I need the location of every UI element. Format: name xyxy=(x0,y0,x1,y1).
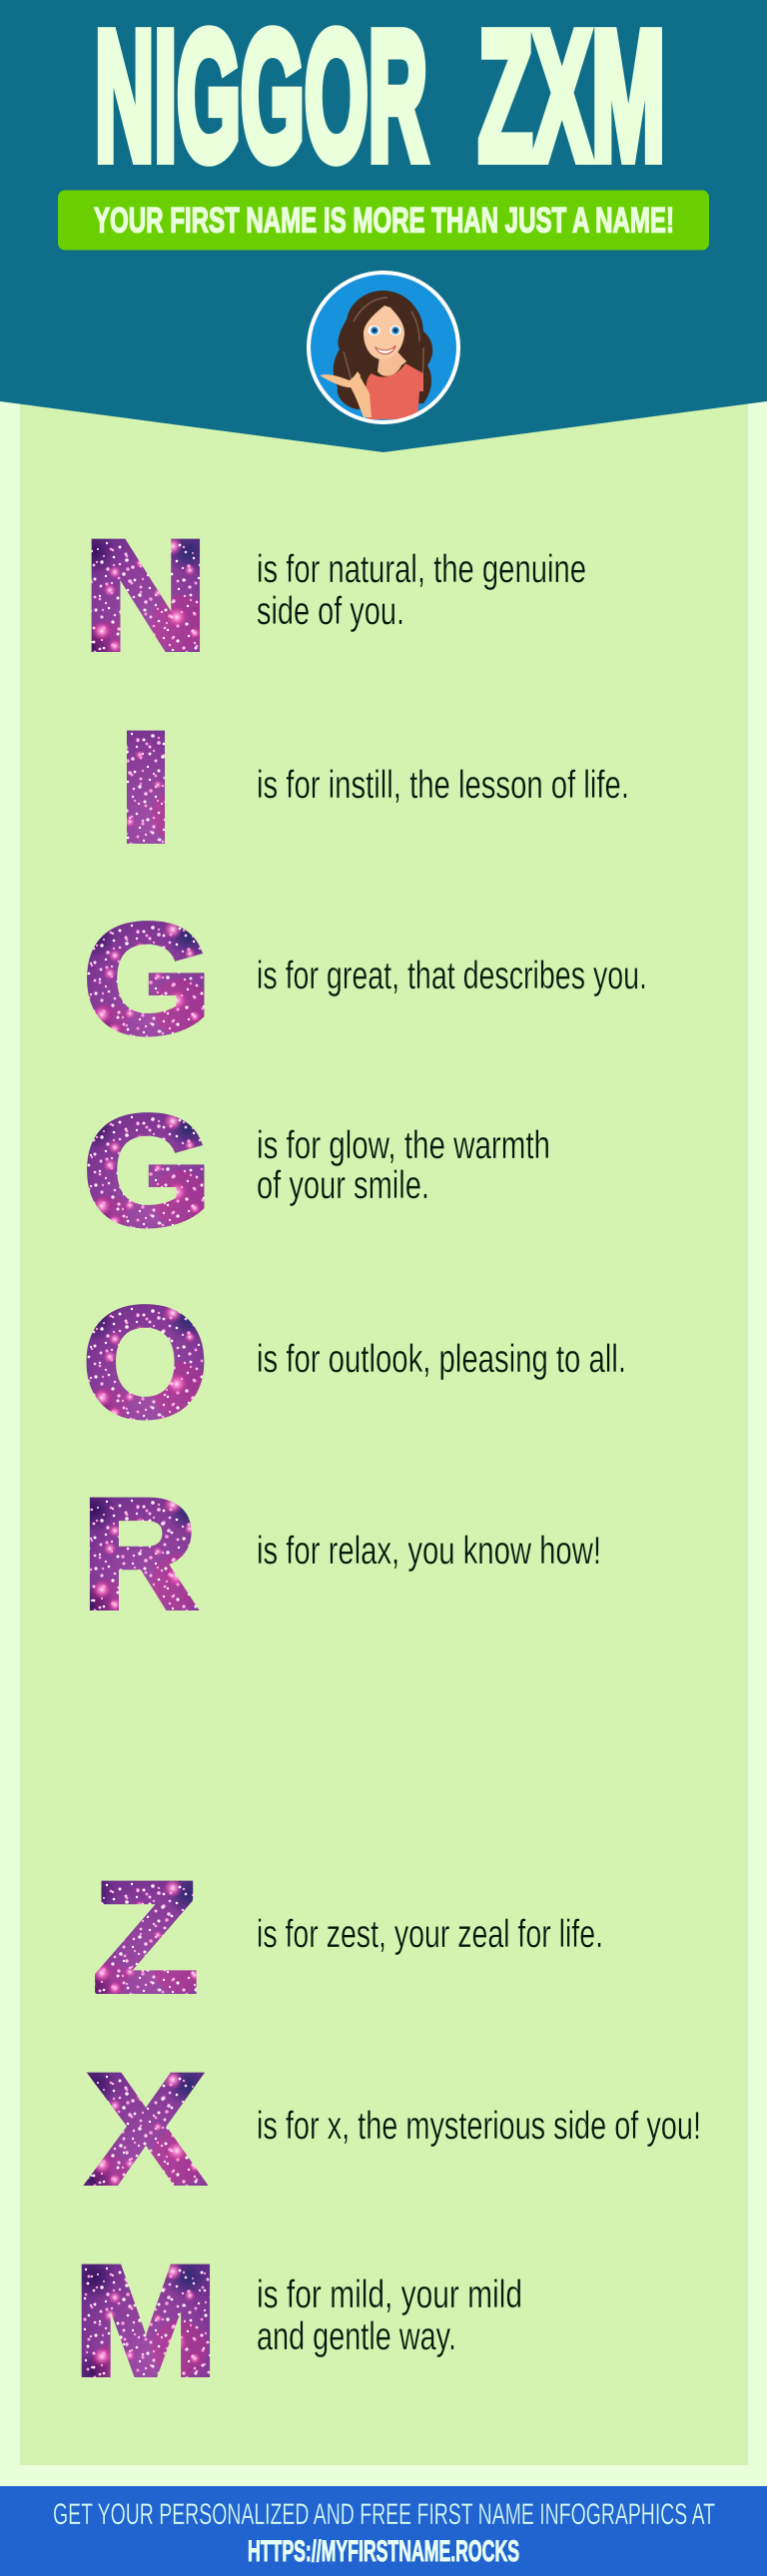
row G second xyxy=(84,1084,550,1258)
footer xyxy=(0,2486,767,2576)
letter Z: Z xyxy=(93,1851,198,2025)
description M xyxy=(257,2273,522,2358)
description Z: is for zest, your zeal for life. xyxy=(257,1913,603,1956)
description I: is for instill, the lesson of life. xyxy=(257,764,629,807)
letter N: N xyxy=(83,509,208,683)
description R: is for relax, you know how! xyxy=(257,1530,601,1573)
letter O: O xyxy=(83,1276,208,1450)
description N: is for natural, the genuine xyxy=(257,548,586,591)
icon: woman avatar xyxy=(307,271,460,424)
footer url: HTTPS://MYFIRSTNAME.ROCKS xyxy=(248,2535,519,2568)
header banner xyxy=(0,0,767,452)
row X xyxy=(88,2043,701,2217)
description G: is for great, that describes you. xyxy=(257,955,647,997)
row N xyxy=(83,509,586,683)
row G xyxy=(84,893,647,1066)
description O: is for outlook, pleasing to all. xyxy=(257,1338,626,1381)
letter R: R xyxy=(82,1468,197,1641)
row R xyxy=(82,1468,601,1641)
description G: of your smile. xyxy=(257,1164,429,1207)
subtitle banner xyxy=(58,190,709,250)
description N: side of you. xyxy=(257,590,404,633)
letter M: M xyxy=(73,2235,218,2408)
letter I: I xyxy=(117,701,175,875)
description G: is for glow, the warmth xyxy=(257,1124,550,1167)
description N xyxy=(257,548,586,633)
panel: content background xyxy=(20,379,748,2465)
letter G: G xyxy=(84,893,212,1066)
description G xyxy=(257,1124,550,1207)
row I xyxy=(117,701,629,875)
letter X: X xyxy=(88,2043,204,2217)
description M: and gentle way. xyxy=(257,2315,456,2358)
description M: is for mild, your mild xyxy=(257,2273,522,2316)
row Z xyxy=(93,1851,603,2025)
letter G: G xyxy=(84,1084,212,1258)
row O xyxy=(83,1276,626,1450)
row M xyxy=(73,2235,522,2408)
